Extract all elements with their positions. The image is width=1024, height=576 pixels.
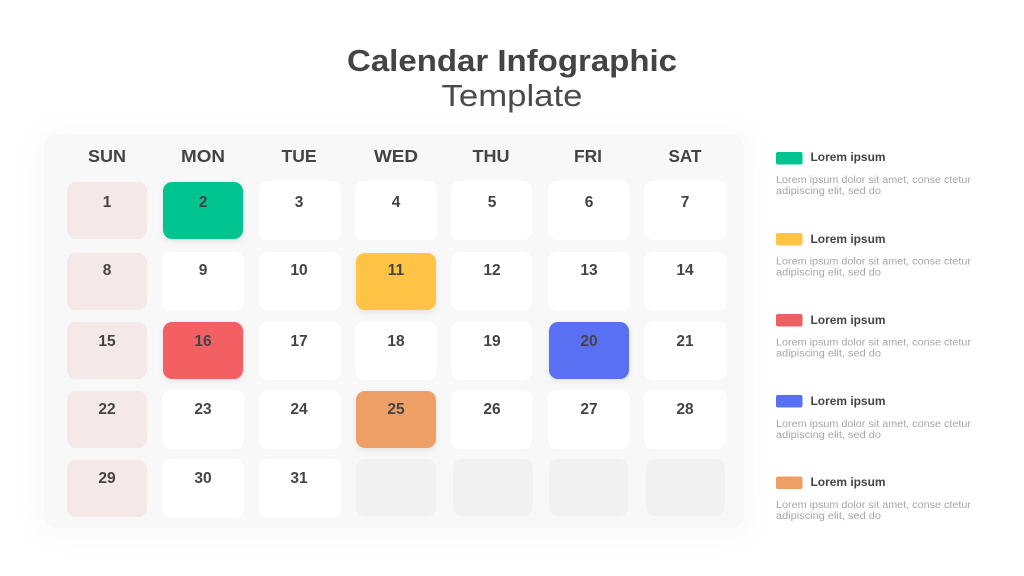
week 3: 17	[290, 333, 308, 350]
week 1: 1	[103, 194, 112, 211]
week 2: 10	[290, 262, 308, 279]
week 3: 15	[98, 333, 116, 350]
week 3: 18	[387, 333, 405, 350]
week 5: 29	[98, 470, 116, 487]
week 2	[67, 252, 727, 311]
weekday headers: MON	[181, 146, 225, 166]
week 2: 14	[676, 262, 694, 279]
weekday headers: SAT	[668, 146, 702, 166]
week 3: 16	[194, 333, 212, 350]
title: Template	[442, 78, 582, 113]
weekday headers: WED	[374, 146, 418, 166]
legend item: orange: Lorem ipsum	[810, 477, 886, 489]
week 2: 11	[388, 262, 405, 279]
week 4: 27	[580, 401, 598, 418]
weekday headers: SUN	[88, 146, 126, 166]
weekday headers: FRI	[574, 146, 602, 166]
panel: calendar	[34, 126, 754, 540]
legend item: yellow: adipiscing elit, sed do	[776, 268, 881, 278]
week 2: 9	[199, 262, 208, 279]
week 4: 23	[194, 401, 212, 418]
legend item: green	[776, 152, 972, 197]
week 3: 21	[676, 333, 694, 350]
week 1: 4	[392, 194, 401, 211]
legend item: red	[776, 314, 972, 360]
week 1	[67, 181, 727, 240]
legend item: red: Lorem ipsum	[810, 315, 886, 327]
week 2: 12	[483, 262, 501, 279]
legend item: green: Lorem ipsum	[810, 152, 886, 164]
legend item: blue: Lorem ipsum dolor sit amet, conse ctetur	[776, 419, 972, 430]
weekday headers: TUE	[282, 146, 316, 166]
week 4: 28	[676, 401, 694, 418]
week 4: 25	[387, 401, 405, 418]
week 2: 13	[580, 262, 598, 279]
legend item: blue: adipiscing elit, sed do	[776, 430, 881, 441]
week 1: 2	[199, 194, 207, 211]
legend item: orange: Lorem ipsum dolor sit amet, conse ctetur	[776, 500, 972, 511]
legend item: green: Lorem ipsum dolor sit amet, conse ctetur	[776, 175, 972, 186]
week 3: 20	[580, 333, 598, 350]
title	[347, 43, 677, 113]
weekday headers: THU	[472, 146, 510, 166]
legend item: blue: Lorem ipsum	[810, 396, 886, 408]
title: Calendar Infographic	[347, 43, 677, 78]
week 3	[67, 321, 727, 380]
legend item: green: adipiscing elit, sed do	[776, 186, 881, 197]
week 4	[67, 390, 727, 449]
week 1: 5	[488, 194, 497, 211]
week 4: 24	[290, 401, 308, 418]
week 3: 19	[483, 333, 501, 350]
legend item: orange: adipiscing elit, sed do	[776, 511, 881, 522]
week 5: 30	[194, 470, 212, 487]
week 1: 7	[681, 194, 689, 211]
legend item: yellow: Lorem ipsum dolor sit amet, conse ctetur	[776, 256, 972, 268]
legend item: red: Lorem ipsum dolor sit amet, conse ctetur	[776, 338, 972, 348]
legend item: red: adipiscing elit, sed do	[776, 348, 881, 360]
legend item: orange	[776, 476, 972, 522]
week 4: 26	[483, 401, 501, 418]
legend item: yellow	[776, 233, 972, 278]
week 1: 3	[295, 194, 304, 211]
legend item: blue	[776, 395, 972, 441]
week 5: 31	[290, 470, 308, 487]
week 2: 8	[103, 262, 112, 279]
week 1: 6	[585, 194, 594, 211]
weekday headers	[88, 146, 702, 166]
week 5	[67, 459, 725, 518]
week 4: 22	[98, 401, 116, 418]
legend item: yellow: Lorem ipsum	[810, 234, 886, 246]
